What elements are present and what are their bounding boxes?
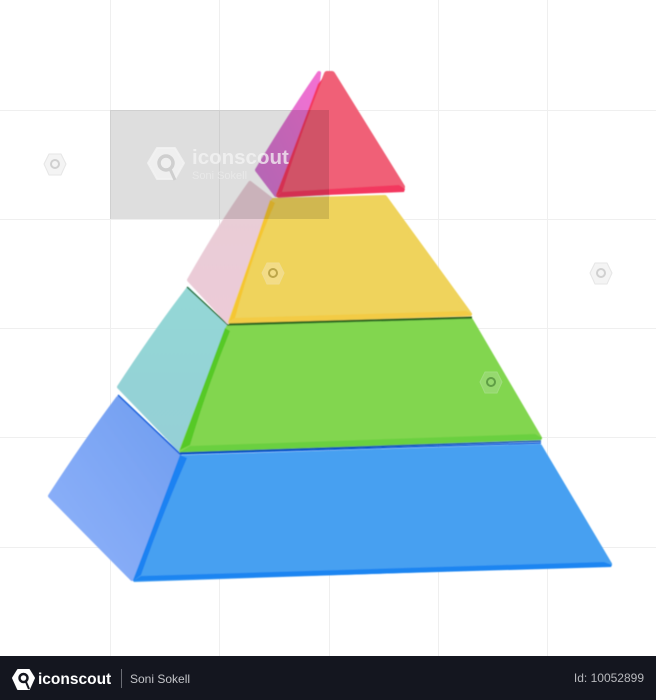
watermark panel: Soni Sokell (192, 170, 247, 182)
tier: green (119, 287, 542, 453)
watermark text: iconscout (192, 146, 289, 169)
watermark panel (110, 110, 329, 219)
icon: small watermark right (590, 263, 612, 284)
icon: small watermark on green (480, 372, 502, 393)
icon: small watermark left (44, 154, 66, 175)
icon: watermark logo (148, 148, 184, 180)
tier: yellow (189, 183, 472, 324)
pyramid (50, 73, 612, 581)
icon: small watermark on yellow (262, 263, 284, 284)
tier: red top (257, 73, 405, 197)
icon: footer logo (13, 670, 34, 689)
footer id: Id: 10052899 (574, 671, 644, 685)
footer author: Soni Sokell (130, 672, 190, 686)
footer bar (0, 656, 656, 700)
tier: blue base (50, 395, 612, 581)
footer brand: iconscout (38, 671, 111, 688)
